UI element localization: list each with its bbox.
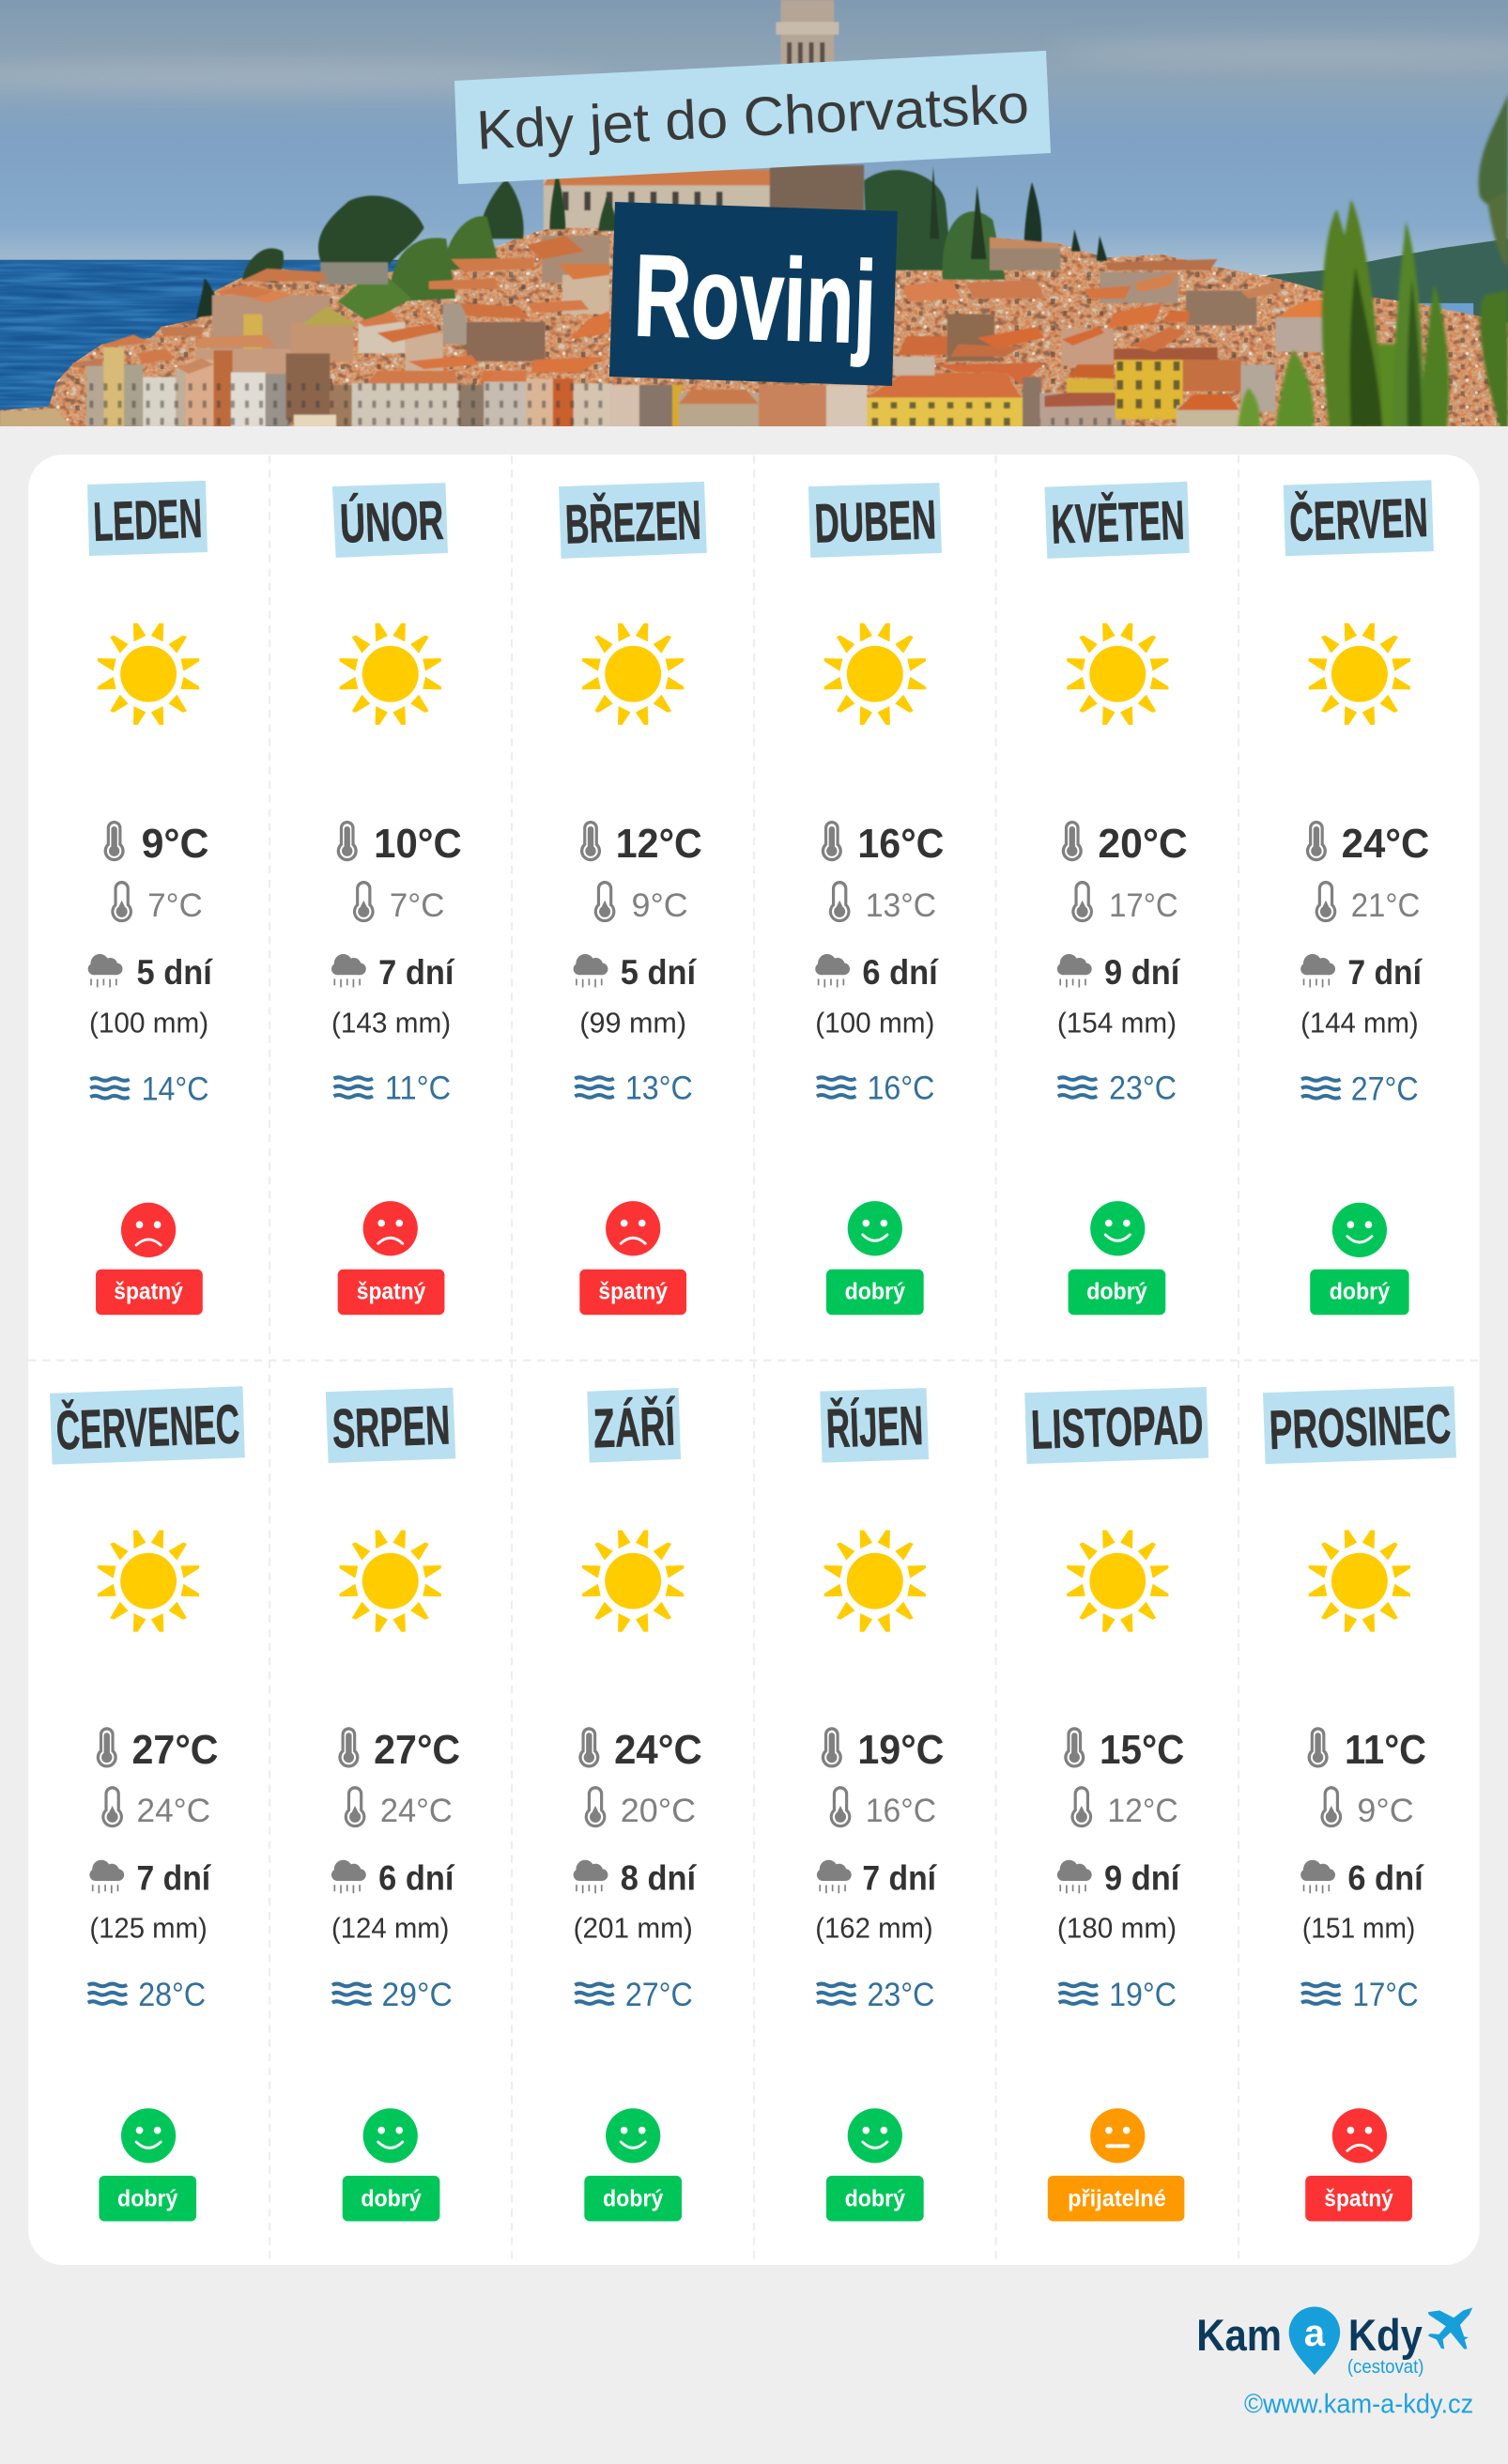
icon: thermometer high (97, 1727, 117, 1768)
icon: thermometer low (1071, 881, 1093, 922)
rainy days: 6 dní (378, 1859, 455, 1898)
high temperature: 24°C (1342, 822, 1429, 867)
label: DUBEN: DUBEN (813, 489, 937, 555)
month: KVĚTEN (1044, 482, 1190, 1315)
icon: happy face (121, 2108, 176, 2163)
sea temperature: 23°C (1109, 1070, 1177, 1107)
low temperature: 21°C (1351, 887, 1420, 924)
icon: sad face (606, 1201, 660, 1255)
badge: dobrý (1069, 1270, 1165, 1315)
high temperature: 20°C (1098, 822, 1188, 867)
low temperature: 9°C (632, 887, 688, 924)
high temperature: 24°C (614, 1728, 702, 1773)
icon: waves (1059, 1984, 1098, 2004)
rainfall: (99 mm) (579, 1009, 686, 1040)
rainfall: (124 mm) (331, 1914, 449, 1945)
badge: špatný: špatný (114, 1279, 183, 1305)
icon: map pin (1289, 2307, 1340, 2375)
rainfall: (100 mm) (89, 1009, 208, 1040)
icon: sun (98, 624, 199, 724)
low temperature: 12°C (1107, 1793, 1178, 1829)
icon: sun (340, 624, 440, 724)
icon: waves (1301, 1078, 1340, 1099)
rainy days: 6 dní (1347, 1859, 1424, 1898)
sea temperature: 28°C (138, 1977, 206, 2013)
month: SRPEN (326, 1388, 460, 2222)
badge: špatný: špatný (598, 1279, 668, 1305)
icon: thermometer low (1070, 1786, 1092, 1827)
rainfall: (144 mm) (1300, 1009, 1419, 1040)
low temperature: 9°C (1357, 1793, 1414, 1829)
label: ŘÍJEN (820, 1388, 929, 1463)
high temperature: 11°C (1345, 1728, 1426, 1773)
icon: rain cloud (817, 1860, 852, 1893)
sea temperature: 19°C (1109, 1977, 1177, 2013)
icon: rain cloud (1057, 1860, 1092, 1893)
icon: thermometer low (353, 881, 375, 922)
icon: thermometer low (111, 881, 132, 922)
sea temperature: 23°C (867, 1977, 934, 2013)
icon: rain cloud (88, 954, 122, 987)
icon: waves (90, 1078, 130, 1099)
icon: happy face (1090, 1201, 1145, 1255)
icon: waves (817, 1984, 855, 2004)
month: LISTOPAD (1024, 1387, 1208, 2222)
icon: sun (582, 624, 684, 724)
icon: thermometer high (1062, 821, 1083, 861)
badge: dobrý: dobrý (845, 1279, 905, 1305)
icon: sun (1068, 624, 1168, 724)
icon: sun (582, 1531, 684, 1631)
high temperature: 19°C (857, 1728, 944, 1773)
rainfall: (162 mm) (815, 1914, 933, 1945)
low temperature: 7°C (147, 887, 203, 924)
high temperature: 27°C (374, 1728, 460, 1773)
label: LISTOPAD: LISTOPAD (1030, 1394, 1204, 1461)
month: BŘEZEN (559, 482, 707, 1315)
label: ŘÍJEN: ŘÍJEN (825, 1394, 924, 1459)
icon: thermometer low (585, 1786, 606, 1827)
icon: rain cloud (815, 954, 850, 987)
sea temperature: 17°C (1352, 1977, 1419, 2013)
label: ČERVENEC (50, 1386, 245, 1465)
icon: waves (332, 1984, 371, 2004)
subtitle: Kdy jet do Chorvatsko (454, 51, 1051, 184)
icon: thermometer high (1064, 1727, 1085, 1768)
label: SRPEN (326, 1388, 455, 1463)
icon: sun (1068, 1531, 1168, 1631)
icon: thermometer low (1316, 881, 1336, 922)
month: DUBEN (808, 483, 944, 1315)
icon: thermometer low (829, 881, 851, 922)
low temperature: 17°C (1109, 887, 1178, 924)
low temperature: 24°C (137, 1793, 210, 1829)
icon: sun (824, 624, 926, 724)
label: BŘEZEN (559, 482, 707, 559)
icon: rain cloud (574, 1860, 608, 1893)
rainfall: (201 mm) (574, 1914, 693, 1945)
sea temperature: 11°C (385, 1070, 451, 1107)
month: ÚNOR (331, 483, 462, 1315)
month: PROSINEC (1263, 1386, 1456, 2222)
label: LEDEN (87, 481, 208, 556)
high temperature: 9°C (142, 822, 208, 867)
sea temperature: 16°C (867, 1070, 934, 1107)
low temperature: 20°C (621, 1793, 696, 1829)
badge: špatný (338, 1270, 444, 1315)
logo tagline: (cestovat) (1347, 2357, 1423, 2378)
icon: thermometer high (580, 821, 601, 861)
rainy days: 8 dní (621, 1859, 698, 1898)
badge: dobrý (826, 1270, 924, 1315)
icon: waves (333, 1077, 373, 1098)
badge: dobrý (826, 2176, 924, 2222)
icon: rain cloud (1057, 954, 1092, 987)
label: DUBEN (808, 483, 942, 558)
icon: rain cloud (1300, 1860, 1335, 1893)
icon: rain cloud (331, 1860, 366, 1893)
sea temperature: 29°C (382, 1977, 453, 2013)
copyright url: ©www.kam-a-kdy.cz (1244, 2390, 1473, 2420)
icon: waves (575, 1984, 614, 2004)
label: KVĚTEN (1044, 482, 1190, 559)
icon: waves (817, 1077, 855, 1098)
title: Rovinj: Rovinj (632, 231, 878, 368)
icon: thermometer high (104, 821, 125, 861)
icon: map pin: a (1304, 2312, 1326, 2354)
icon: happy face (848, 2108, 902, 2163)
icon: waves (1301, 1984, 1340, 2004)
badge: dobrý (99, 2176, 196, 2222)
badge: přijatelné: přijatelné (1068, 2185, 1166, 2211)
month: LEDEN (87, 481, 213, 1315)
logo: Kam a Kdy (1196, 2307, 1472, 2378)
icon: rain cloud (89, 1860, 124, 1893)
panel: calendar card (28, 454, 1480, 2265)
icon: happy face (848, 1201, 902, 1255)
title: Rovinj (609, 202, 898, 386)
rainy days: 7 dní (862, 1859, 938, 1898)
icon: thermometer high (822, 821, 842, 861)
month: ČERVEN (1284, 480, 1434, 1315)
label: LEDEN: LEDEN (92, 488, 203, 553)
sea temperature: 27°C (1351, 1071, 1419, 1108)
badge: dobrý: dobrý (361, 2185, 422, 2211)
logo word: Kam: Kam (1196, 2311, 1282, 2360)
label: ZÁŘÍ (587, 1388, 681, 1463)
label: BŘEZEN: BŘEZEN (564, 488, 702, 556)
month: ZÁŘÍ (574, 1388, 702, 2222)
month: ŘÍJEN (815, 1388, 944, 2222)
label: ČERVENEC: ČERVENEC (55, 1392, 240, 1461)
icon: thermometer high (1308, 1727, 1329, 1768)
rainfall: (180 mm) (1057, 1914, 1177, 1945)
header photo: Rovinj old town (0, 0, 1508, 427)
badge: dobrý: dobrý (845, 2185, 905, 2211)
rainfall: (125 mm) (89, 1914, 208, 1945)
icon: waves (575, 1077, 614, 1098)
rainy days: 6 dní (862, 953, 939, 992)
icon: thermometer high (338, 1727, 359, 1768)
rainfall: (100 mm) (815, 1009, 934, 1040)
icon: happy face (1332, 1203, 1387, 1257)
icon: airplane (1428, 2308, 1472, 2349)
label: SRPEN: SRPEN (331, 1394, 452, 1460)
icon: thermometer low (101, 1786, 123, 1827)
rainy days: 7 dní (378, 953, 455, 992)
icon: rain cloud (1300, 954, 1335, 987)
high temperature: 12°C (616, 822, 702, 867)
label: ÚNOR: ÚNOR (339, 489, 444, 555)
badge: dobrý: dobrý (1086, 1279, 1147, 1305)
label: LISTOPAD (1024, 1387, 1208, 1464)
logo word: Kdy: Kdy (1348, 2311, 1423, 2360)
icon: happy face (363, 2108, 418, 2163)
label: KVĚTEN: KVĚTEN (1050, 488, 1186, 556)
badge: špatný: špatný (357, 1279, 425, 1305)
icon: sun (1309, 1531, 1410, 1631)
label: ÚNOR (332, 483, 448, 558)
sea temperature: 27°C (625, 1977, 693, 2013)
sea temperature: 13°C (625, 1070, 693, 1107)
badge: špatný (96, 1270, 203, 1315)
icon: thermometer low (594, 881, 615, 922)
icon: sad face (121, 1203, 176, 1257)
badge: špatný (579, 1270, 686, 1315)
high temperature: 10°C (374, 822, 462, 867)
icon: sun (98, 1531, 199, 1631)
badge: dobrý (1310, 1270, 1409, 1315)
subtitle: Kdy jet do Chorvatsko: Kdy jet do Chorvatsko (475, 73, 1030, 162)
badge: dobrý: dobrý (1330, 1279, 1390, 1305)
badge: špatný: špatný (1324, 2185, 1393, 2211)
icon: sun (824, 1531, 926, 1631)
icon: thermometer high (337, 821, 358, 861)
icon: thermometer high (822, 1727, 842, 1768)
icon: sun (1309, 624, 1410, 724)
icon: neutral face (1090, 2108, 1145, 2163)
high temperature: 15°C (1100, 1728, 1184, 1773)
badge: špatný (1305, 2176, 1412, 2222)
sea temperature: 14°C (142, 1071, 208, 1108)
icon: happy face (606, 2108, 660, 2163)
rainy days: 7 dní (1347, 953, 1423, 992)
icon: rain cloud (574, 954, 608, 987)
icon: waves (1058, 1077, 1097, 1098)
low temperature: 16°C (866, 1793, 936, 1829)
label: ČERVEN (1284, 480, 1434, 556)
rainfall: (151 mm) (1302, 1914, 1415, 1945)
badge: dobrý: dobrý (603, 2185, 663, 2211)
icon: thermometer low (345, 1786, 365, 1827)
icon: thermometer low (830, 1786, 851, 1827)
low temperature: 13°C (866, 887, 936, 924)
rainy days: 9 dní (1104, 953, 1181, 992)
icon: rain cloud (331, 954, 366, 987)
high temperature: 16°C (857, 822, 944, 867)
icon: thermometer high (1306, 821, 1327, 861)
icon: sad face (1332, 2108, 1387, 2163)
badge: dobrý: dobrý (117, 2185, 177, 2211)
icon: waves (88, 1984, 127, 2004)
high temperature: 27°C (132, 1728, 219, 1773)
icon: thermometer high (578, 1727, 599, 1768)
low temperature: 24°C (380, 1793, 453, 1829)
rainfall: (154 mm) (1057, 1009, 1177, 1040)
label: ZÁŘÍ: ZÁŘÍ (592, 1394, 677, 1459)
rainy days: 5 dní (621, 953, 698, 992)
icon: sad face (363, 1201, 418, 1255)
rainy days: 5 dní (137, 953, 213, 992)
badge: dobrý (584, 2176, 682, 2222)
month: ČERVENEC (50, 1386, 245, 2222)
rainfall: (143 mm) (331, 1009, 451, 1040)
badge: přijatelné (1048, 2176, 1184, 2222)
icon: sun (340, 1531, 440, 1631)
rainy days: 7 dní (137, 1859, 212, 1898)
rainy days: 9 dní (1104, 1859, 1181, 1898)
badge: dobrý (343, 2176, 439, 2222)
icon: thermometer low (1320, 1786, 1342, 1827)
low temperature: 7°C (390, 887, 444, 924)
